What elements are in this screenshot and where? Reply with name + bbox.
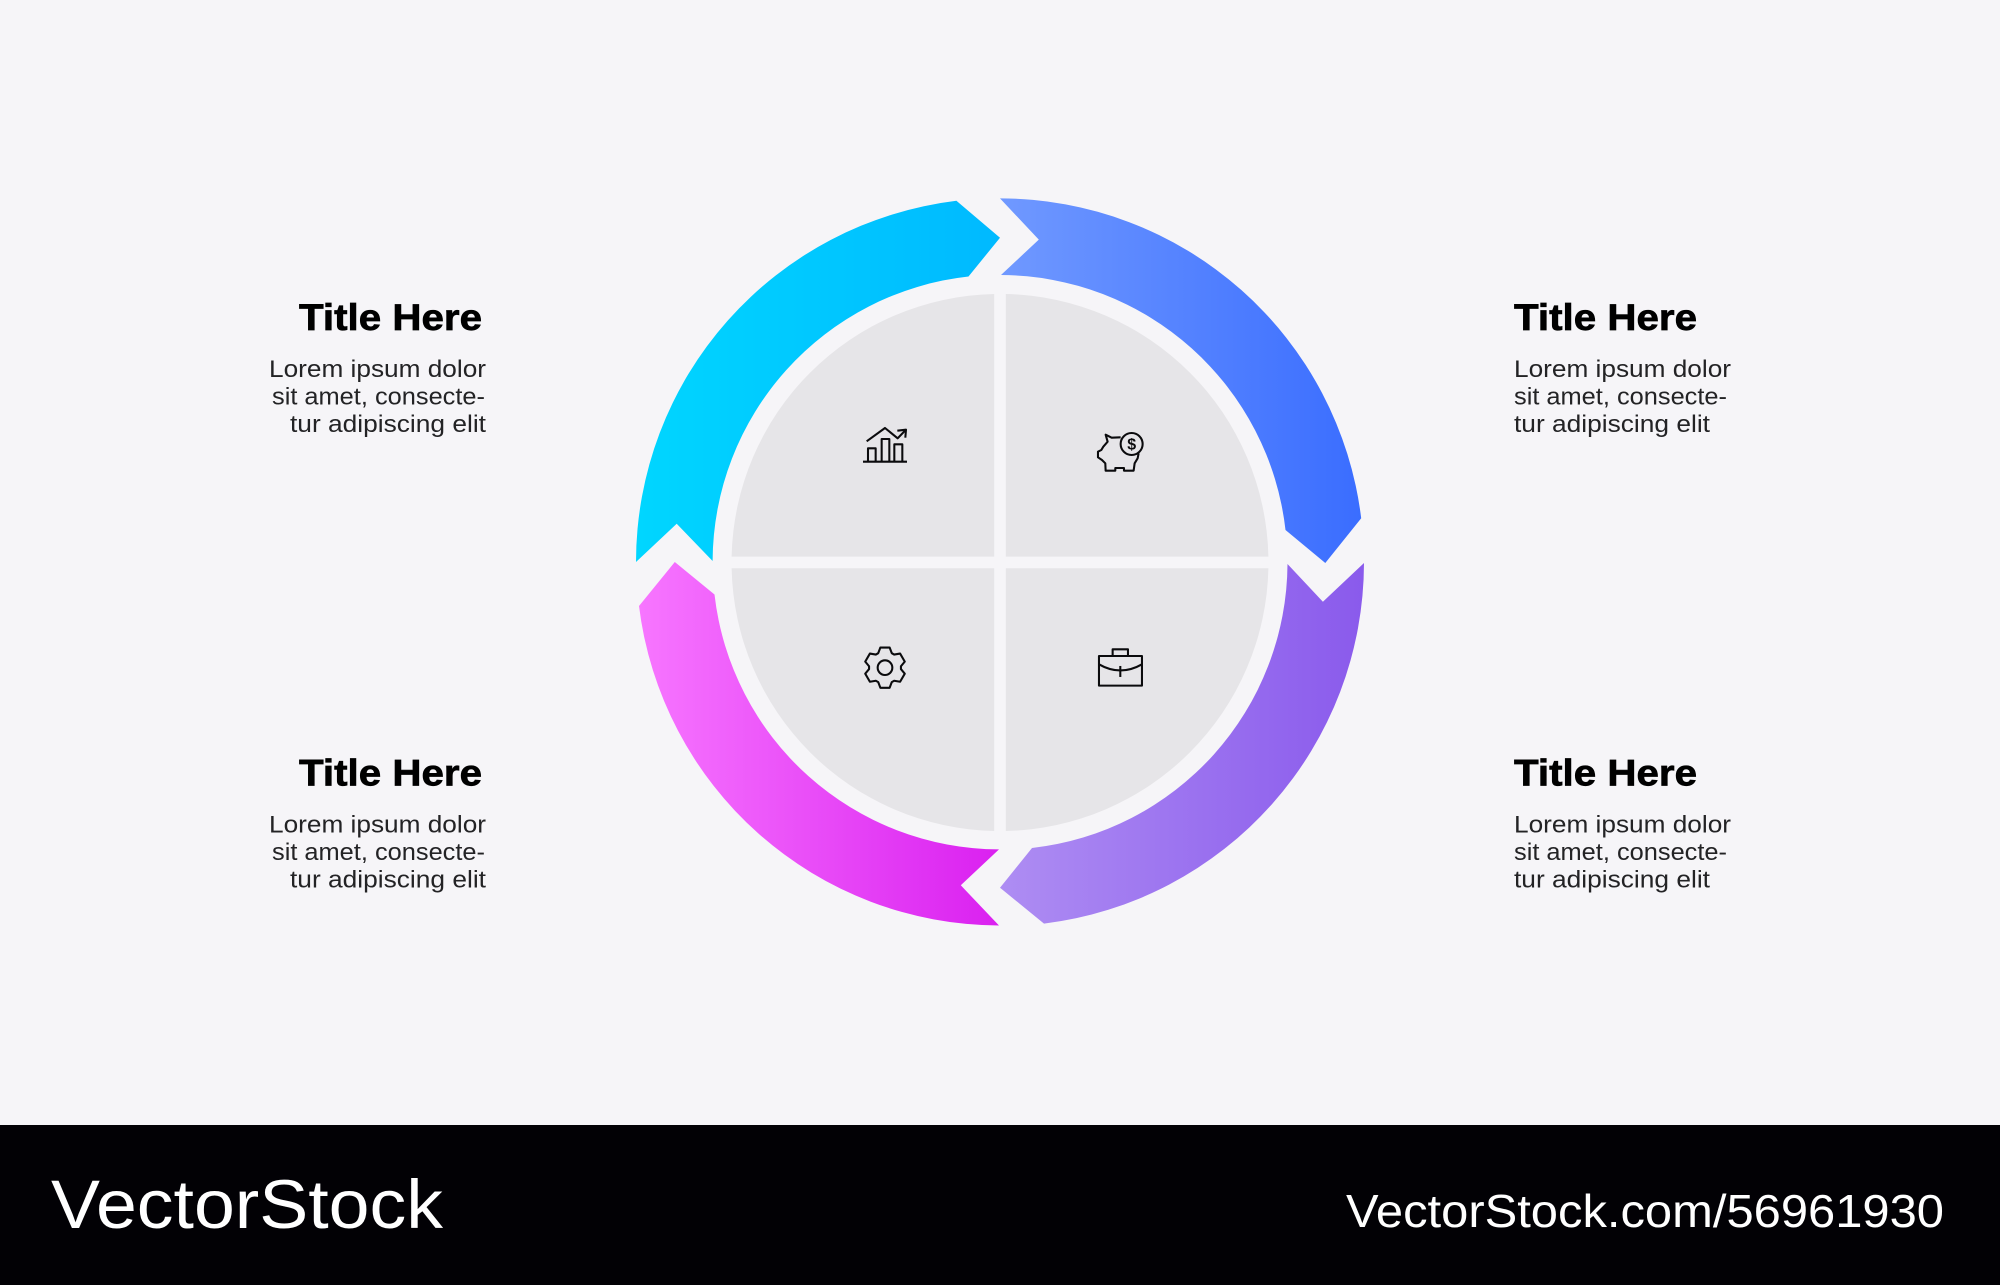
body text: tur adipiscing elit xyxy=(290,866,486,894)
arrow segment: purple bottom-right xyxy=(1000,563,1364,924)
text block: bottom-right xyxy=(1514,752,1731,894)
body text: sit amet, consecte- xyxy=(272,839,485,866)
heading: Title Here xyxy=(299,752,482,794)
body text: sit amet, consecte- xyxy=(1514,384,1727,410)
arrow segment: magenta bottom-left xyxy=(639,562,999,926)
footer banner xyxy=(0,1125,2000,1285)
body text xyxy=(269,356,486,438)
body text: Lorem ipsum dolor xyxy=(1514,812,1731,838)
body text: tur adipiscing elit xyxy=(290,411,486,438)
footer logo text: VectorStock xyxy=(51,1166,444,1243)
body text: Lorem ipsum dolor xyxy=(1514,356,1731,383)
center quadrant: bottom-left xyxy=(732,568,994,831)
heading: Title Here xyxy=(299,297,482,338)
body text xyxy=(1514,356,1731,438)
text block: top-right xyxy=(1514,297,1731,438)
body text: Lorem ipsum dolor xyxy=(269,812,486,838)
heading: Title Here xyxy=(1514,752,1697,794)
heading: Title Here xyxy=(1514,297,1697,338)
body text: tur adipiscing elit xyxy=(1514,411,1710,438)
body text: Lorem ipsum dolor xyxy=(269,356,486,383)
text block: bottom-left xyxy=(269,752,486,894)
center quadrant: top-right xyxy=(1006,294,1268,557)
center quadrant: top-left xyxy=(732,294,994,557)
arrow segment: cyan top-left xyxy=(636,201,1000,562)
circular diagram xyxy=(636,198,1364,925)
icon: briefcase xyxy=(1099,649,1142,686)
icon: bar chart with trend arrow xyxy=(863,428,907,462)
body text: tur adipiscing elit xyxy=(1514,866,1710,894)
text block: top-left xyxy=(269,297,486,438)
footer url text: VectorStock.com/56961930 xyxy=(1346,1185,1944,1237)
center quadrant: bottom-right xyxy=(1006,568,1268,831)
body text xyxy=(1514,812,1731,894)
body text: sit amet, consecte- xyxy=(272,384,485,410)
icon: piggy bank with coin xyxy=(1098,433,1143,471)
icon: piggy bank with coin: $ xyxy=(1127,437,1136,454)
icon: gear xyxy=(865,648,905,688)
arrow segment: blue top-right xyxy=(1000,198,1361,563)
body text xyxy=(269,812,486,894)
body text: sit amet, consecte- xyxy=(1514,839,1727,866)
